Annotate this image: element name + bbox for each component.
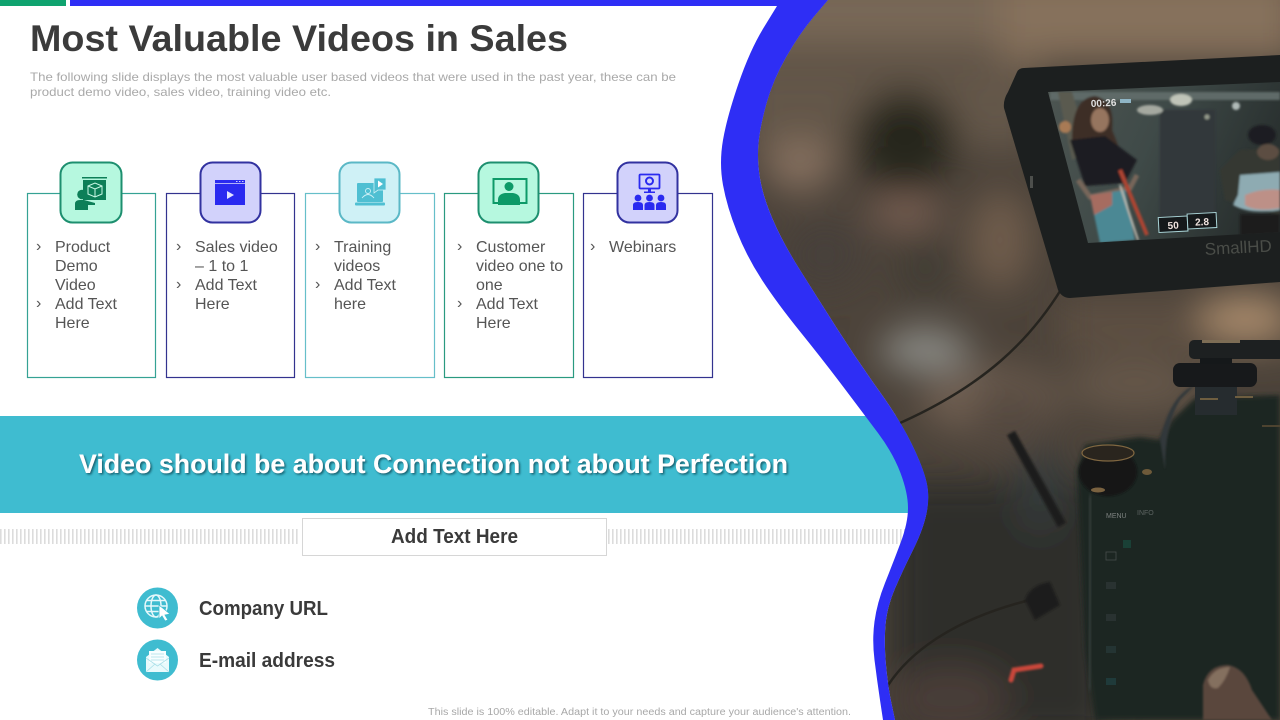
blurred background — [740, 0, 1280, 720]
blue curved ribbon — [721, 0, 928, 720]
card text: Here — [476, 315, 511, 332]
card text: Training — [334, 239, 391, 256]
card text: › — [176, 276, 181, 293]
text box: Add Text Here: Add Text Here — [391, 526, 518, 548]
card text: › — [315, 276, 320, 293]
monitor screen scene — [1050, 92, 1280, 243]
card text: › — [457, 238, 462, 255]
card text: here — [334, 296, 366, 313]
camera body: MENU — [1106, 513, 1127, 520]
card text: Demo — [55, 258, 98, 275]
striped divider — [0, 529, 908, 544]
monitor screen scene: 50 — [1167, 220, 1179, 232]
card text: Sales video — [195, 239, 278, 256]
thin cables — [884, 288, 1062, 692]
subtitle text block: product demo video, sales video, training video etc. — [30, 85, 331, 99]
card text: videos — [334, 258, 380, 275]
finger — [1203, 665, 1272, 720]
monitor — [1004, 55, 1280, 298]
card text — [315, 238, 397, 313]
camera body: INFO — [1137, 510, 1154, 517]
photo panel: camera and monitor — [740, 0, 1280, 720]
banner — [0, 416, 930, 513]
icon: webinar audience — [618, 162, 678, 222]
card text: › — [36, 238, 41, 255]
monitor screen scene: 00:26 — [1091, 98, 1117, 110]
icon: product demo presenter — [60, 162, 122, 222]
subtitle text block — [30, 70, 676, 99]
icon: open envelope — [137, 640, 178, 680]
card: Customer video — [444, 162, 574, 378]
text box: Add Text Here — [302, 518, 606, 556]
contact row: E-mail address: E-mail address — [199, 650, 335, 672]
card: Webinars — [584, 162, 712, 378]
card text: Product — [55, 239, 111, 256]
card text: Add Text — [195, 277, 258, 294]
camera body — [1011, 340, 1280, 720]
card text: Webinars — [609, 239, 676, 256]
card text: Here — [195, 296, 230, 313]
card text — [36, 238, 118, 332]
card: Product Demo Video — [28, 162, 156, 378]
card: Training videos — [306, 162, 434, 378]
card text: Customer — [476, 239, 546, 256]
card text: Video — [55, 277, 96, 294]
card text: one — [476, 277, 503, 294]
top accent bar — [0, 0, 780, 6]
card text: – 1 to 1 — [195, 258, 248, 275]
card text — [176, 238, 278, 313]
subtitle text block: The following slide displays the most valuable user based videos that were used in the past year, these can be — [30, 70, 676, 84]
contact row: Company URL — [137, 588, 328, 628]
banner quote: Video should be about Connection not about Perfection — [79, 449, 788, 479]
icon: video player — [200, 162, 260, 222]
card text: › — [176, 238, 181, 255]
card text: Here — [55, 315, 90, 332]
card text: › — [590, 238, 595, 255]
monitor screen scene: 2.8 — [1195, 217, 1210, 229]
card text: › — [315, 238, 320, 255]
title: Most Valuable Videos in Sales — [30, 18, 568, 59]
contact row: E-mail address — [137, 640, 335, 680]
card text: Add Text — [55, 296, 118, 313]
card text — [457, 238, 563, 332]
card text: video one to — [476, 258, 563, 275]
card text: › — [36, 295, 41, 312]
card text: Add Text — [476, 296, 539, 313]
card text: › — [457, 295, 462, 312]
monitor: SmallHD — [1204, 237, 1272, 259]
footer note: This slide is 100% editable. Adapt it to your needs and capture your audience's attention. — [428, 707, 851, 718]
icon: globe with cursor — [137, 588, 178, 628]
card text: Add Text — [334, 277, 397, 294]
icon: training laptop — [340, 162, 400, 222]
contact row: Company URL: Company URL — [199, 598, 328, 620]
cable knob — [1025, 582, 1060, 620]
icon: customer on screen — [478, 162, 538, 222]
red light — [1011, 666, 1041, 680]
card: Sales video — [166, 162, 294, 378]
